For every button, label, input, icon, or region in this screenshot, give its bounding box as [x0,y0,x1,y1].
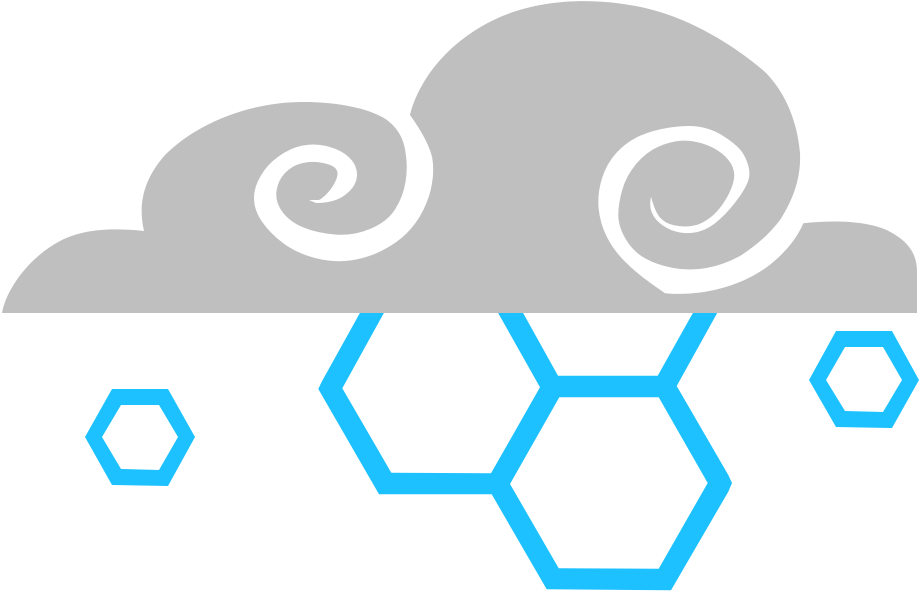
icon: small hexagon right [809,331,919,428]
icon: connected large hexagons under the cloud [318,311,732,590]
icon: cloud with two spirals [2,1,917,313]
icon: small hexagon left [85,389,195,486]
